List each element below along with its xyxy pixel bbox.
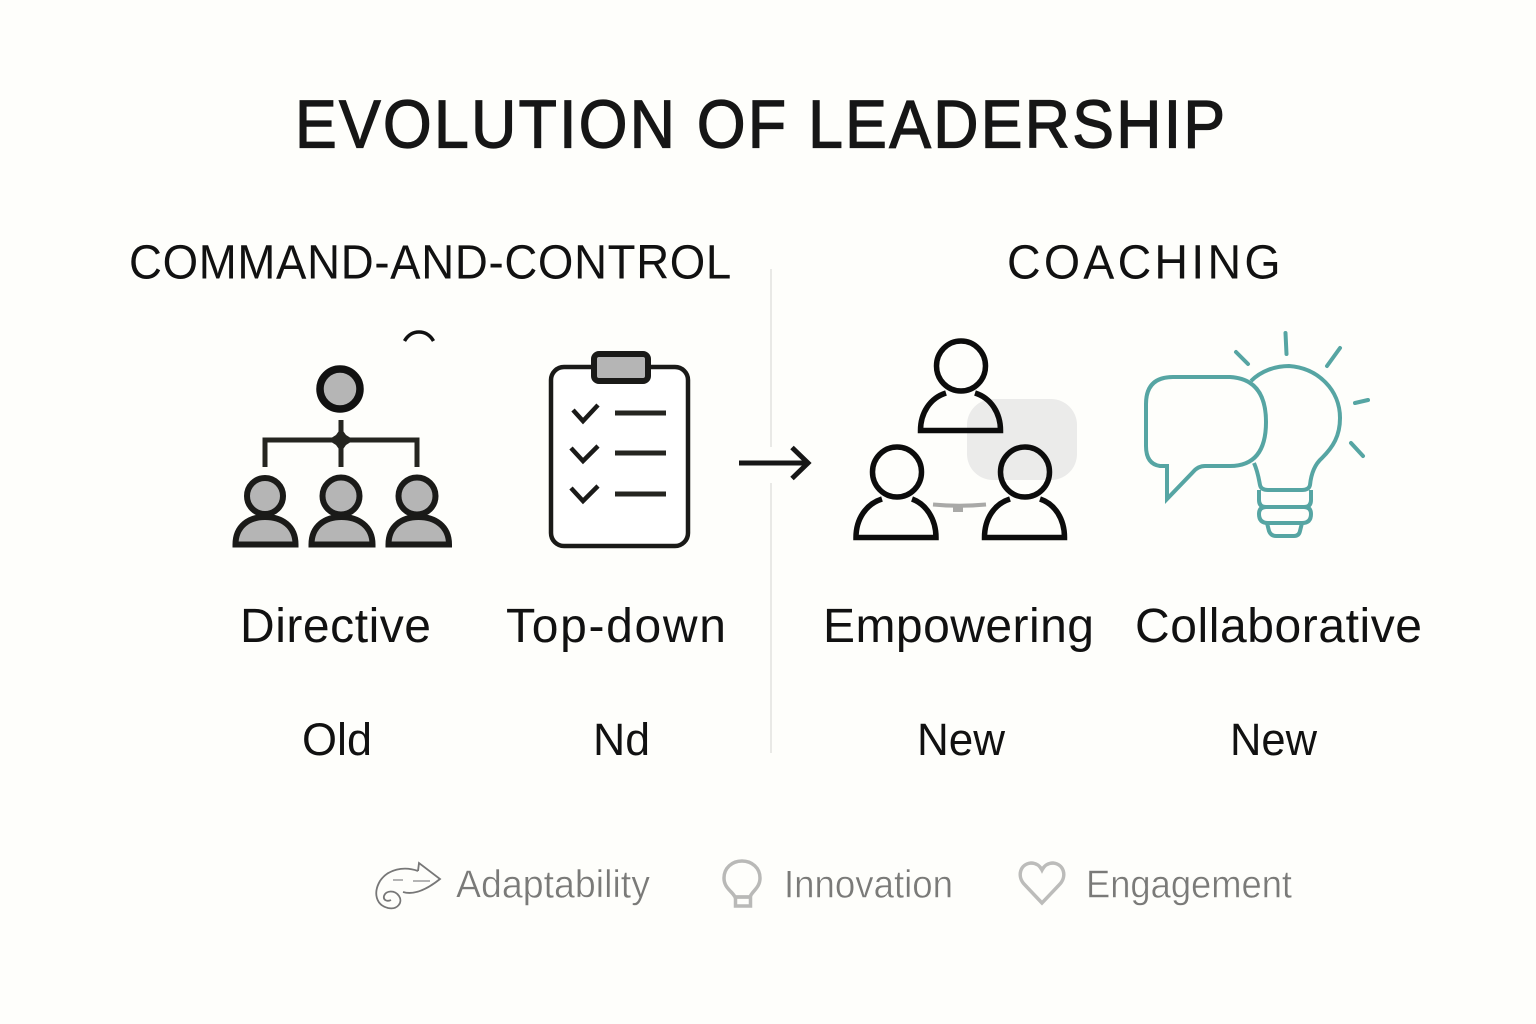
icon: hierarchy	[236, 369, 449, 544]
arrow: old to new	[739, 448, 808, 478]
label: collaborative: Collaborative	[1135, 600, 1422, 653]
text: innovation: Innovation	[784, 864, 953, 906]
tag: new (collaborative): New	[1230, 714, 1317, 765]
icon: heart	[1020, 863, 1064, 903]
title: EVOLUTION OF LEADERSHIP	[295, 86, 1225, 162]
heading: coaching: COACHING	[1007, 236, 1281, 290]
heading: command-and-control: COMMAND-AND-CONTROL	[129, 235, 731, 289]
text: engagement: Engagement	[1086, 864, 1292, 906]
icon: small bulb	[724, 861, 760, 906]
label: directive: Directive	[240, 600, 431, 653]
tag: old: Old	[302, 714, 372, 765]
icon: empowering team	[856, 341, 1077, 538]
icon: small arc	[404, 332, 434, 341]
icon: speech bubble and light bulb	[1146, 333, 1368, 536]
text: adaptability: Adaptability	[456, 864, 650, 906]
icon: chameleon	[376, 863, 440, 908]
tag: new (empowering): New	[917, 714, 1005, 765]
tag: nd: Nd	[593, 714, 650, 765]
label: empowering: Empowering	[823, 600, 1094, 653]
label: top-down: Top-down	[506, 600, 726, 653]
icon: clipboard checklist	[551, 354, 688, 546]
